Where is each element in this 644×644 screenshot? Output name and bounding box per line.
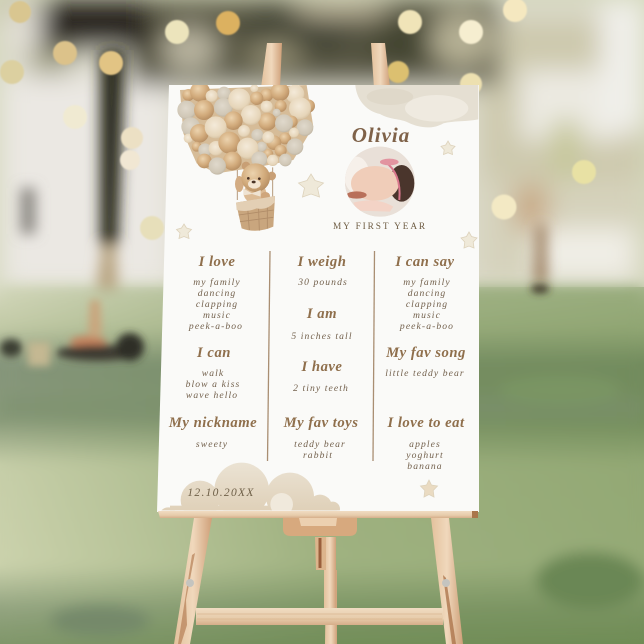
date: 12.10.20XX [187, 487, 255, 499]
icon: stars [176, 141, 477, 497]
column dividers [268, 251, 374, 461]
column 3: peek-a-boo [399, 321, 454, 332]
column 1: clapping [196, 299, 238, 310]
column 1: sweety [196, 439, 228, 450]
column 3: music [413, 310, 441, 321]
column 3: little teddy bear [385, 368, 465, 379]
name: Olivia: Olivia [352, 123, 410, 147]
column 2: I weigh [297, 254, 346, 270]
poster board [157, 82, 479, 526]
column 1: blow a kiss [186, 379, 240, 390]
column 2: My fav toys [283, 415, 358, 431]
column 2: 2 tiny teeth [293, 383, 349, 394]
column 3: banana [407, 461, 443, 472]
column 3: My fav song [385, 345, 466, 361]
column 1: I can [196, 345, 231, 361]
column 1: dancing [198, 288, 236, 299]
hot air balloon cluster [177, 82, 315, 175]
subtitle: MY FIRST YEAR [333, 222, 427, 232]
column 3: my family [403, 277, 451, 288]
easel: tray, bracket, legs and crossbar [158, 511, 478, 644]
column 1: my family [193, 277, 241, 288]
column 1 [168, 254, 257, 450]
column 1: walk [202, 368, 224, 379]
column 3: I can say [394, 254, 455, 270]
column 3: I love to eat [386, 415, 465, 431]
column 2: 30 pounds [297, 277, 348, 288]
baby photo [343, 147, 417, 217]
column 2: 5 inches tall [291, 331, 353, 342]
column 2 [283, 254, 358, 461]
column 1: I love [198, 254, 235, 270]
column 1: My nickname [168, 415, 257, 431]
column 1: peek-a-boo [188, 321, 243, 332]
column 1: music [203, 310, 231, 321]
top right cloud [355, 85, 478, 127]
bottom clouds [162, 462, 340, 510]
column 2: I am [306, 306, 337, 322]
column 3: dancing [408, 288, 446, 299]
column 2: rabbit [303, 450, 333, 461]
column 2: I have [301, 359, 342, 375]
column 3 [385, 254, 466, 472]
icon: teddy bear in basket [235, 162, 276, 231]
column 3: apples [409, 439, 441, 450]
column 3: clapping [406, 299, 448, 310]
column 2: teddy bear [294, 439, 346, 450]
easel: top posts [261, 43, 390, 88]
column 3: yoghurt [405, 450, 444, 461]
column 1: wave hello [186, 390, 238, 401]
